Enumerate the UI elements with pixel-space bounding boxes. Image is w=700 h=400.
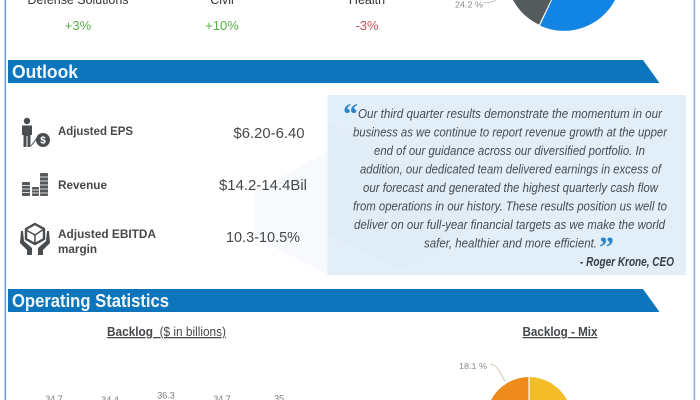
bar chart: backlog values — [45, 390, 284, 400]
quote text: Our third quarter results demonstrate the momentum in our — [358, 107, 663, 121]
pie chart: backlog mix: 18.1 % — [459, 361, 487, 371]
watermark: hexagon — [255, 150, 400, 275]
quote text: safer, healthier and more efficient. — [424, 236, 597, 250]
value: Revenue: $14.2-14.4Bil — [219, 178, 307, 194]
value: Adjusted EBITDA margin: 10.3-10.5% — [226, 230, 300, 246]
quote text: end of our guidance across our diversified portfolio. In — [374, 144, 645, 158]
heading: Outlook: Outlook — [12, 62, 79, 82]
quote text: from operations in our history. These results position us well to — [353, 200, 667, 214]
quote text: business as we continue to report revenue growth at the upper — [353, 126, 668, 140]
label: Adjusted EBITDA margin: margin — [58, 242, 97, 256]
value: Adjusted EPS: $6.20-6.40 — [234, 126, 304, 142]
value: Civil growth: +10% — [205, 18, 239, 33]
icon: opening quotation mark: “ — [343, 98, 358, 131]
label: Adjusted EBITDA margin: Adjusted EBITDA — [58, 227, 156, 241]
panel: quote — [328, 95, 686, 275]
icon: closing quotation mark: ” — [599, 231, 614, 264]
value: Defense Solutions growth: +3% — [65, 18, 92, 33]
panel: segment growth — [28, 0, 385, 33]
icon: coin stacks — [22, 173, 48, 196]
attribution: - Roger Krone, CEO — [580, 255, 674, 269]
label: Adjusted EPS: Adjusted EPS — [58, 124, 133, 138]
label: Revenue: Revenue — [58, 178, 107, 192]
heading: Outlook — [8, 60, 660, 83]
panel: outlook metrics — [20, 118, 307, 256]
quote text: addition, our dedicated team delivered earnings in excess of — [360, 162, 662, 176]
value: Health growth: -3% — [355, 18, 379, 33]
pie chart: backlog mix — [459, 361, 567, 400]
quote text: deliver on our full-year financial targets as we make the world — [354, 218, 666, 232]
label: Adjusted EBITDA margin — [58, 227, 156, 256]
chart title: Backlog: Backlog ($ in billions) — [107, 325, 226, 339]
quote text: our forecast and generated the highest quarterly cash flow — [363, 181, 659, 195]
pie chart: segment mix — [455, 0, 615, 31]
heading: Operating Statistics — [8, 289, 660, 312]
chart title: Backlog - Mix: Backlog - Mix — [522, 325, 598, 339]
icon: hands holding box — [20, 224, 50, 255]
icon: person with dollar coin — [22, 118, 50, 147]
heading: Operating Statistics: Operating Statistics — [12, 291, 169, 311]
quote text — [353, 107, 668, 250]
icon: person with dollar coin: $ — [40, 136, 46, 146]
